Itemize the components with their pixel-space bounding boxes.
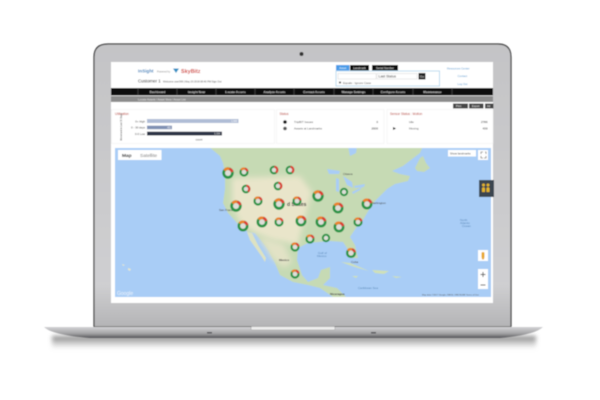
search tabs: Serial Number (376, 66, 394, 70)
north america land (208, 146, 423, 297)
search box: Go (420, 74, 424, 78)
laptop (44, 44, 543, 349)
breadcrumb bar (111, 96, 493, 102)
map labels: Ottawa (343, 172, 353, 176)
hudson bay (348, 146, 357, 156)
map labels: Mexico (279, 258, 289, 262)
street view pegman (478, 250, 488, 261)
map labels: Mexico (317, 254, 327, 258)
webcam (300, 52, 304, 56)
sensor rows: Moving (409, 127, 419, 131)
status rows: 0 (376, 120, 378, 124)
customer name: Welcome user369 | May 20 2019 08:40 PM Sign Out (163, 80, 222, 84)
panel: sensor status (387, 110, 493, 144)
utilization heading: Utilization (115, 112, 129, 116)
map labels: Atlantic (460, 221, 470, 225)
navigation bar: Locate Assets (225, 90, 246, 94)
navigation bar: Contact Assets (303, 90, 325, 94)
search tabs: Landmark (353, 66, 366, 70)
map labels: Washington (370, 201, 386, 205)
screen background (111, 62, 493, 303)
google wordmark: Google (117, 291, 133, 297)
top right links (447, 66, 470, 86)
search tabs: Asset (339, 66, 347, 70)
bar chart: 1,334 (214, 134, 221, 136)
arid west and plains tint (232, 176, 312, 246)
attribution: Map data ©2017 Google, INEGI, ORION-ME Terms of Use (422, 294, 480, 296)
great lakes (327, 169, 365, 194)
status rows (283, 120, 378, 131)
search tabs (336, 65, 398, 71)
panel: utilization (112, 110, 274, 144)
export buttons: Print (456, 104, 462, 108)
navigation bar: Dashboard (150, 90, 166, 94)
map type toggle: Map (122, 153, 132, 159)
navigation bar: Configure Assets (381, 90, 406, 94)
logo: InSight powered by SkyBitz: InSight (138, 68, 154, 74)
bar chart: 451 (167, 128, 172, 130)
bar chart (131, 119, 238, 142)
bar chart: count (196, 138, 203, 142)
side panel button (479, 180, 494, 197)
screen (111, 62, 494, 303)
search box: Equals : Ignore Case (343, 81, 371, 85)
map labels (219, 172, 471, 296)
bar chart: 1,988 (231, 121, 238, 123)
mexico tint (258, 236, 292, 268)
navigation bar: Maintenance (423, 90, 442, 94)
map labels: d States (287, 202, 307, 208)
map type toggle: Satellite (140, 153, 157, 159)
caribbean islands (341, 262, 402, 278)
bar chart: 0 - 30 days (131, 126, 146, 130)
status heading: Status (280, 112, 289, 116)
customer name (138, 78, 222, 84)
navigation bar: Manage Settings (342, 90, 366, 94)
top right links: Resources Center (447, 66, 470, 70)
map labels: Nicaragua (330, 292, 345, 296)
customer name: Customer 1 (138, 78, 161, 84)
ocean (115, 148, 491, 297)
laptop lid (94, 44, 511, 327)
search box: Last Status (378, 75, 396, 79)
sensor heading: Sensor Status : Motion (390, 112, 422, 116)
logo: InSight powered by SkyBitz: Powered by (157, 70, 171, 74)
export buttons: Ad (487, 104, 491, 108)
navigation bar: Analyze Assets (264, 90, 286, 94)
panel: status (276, 110, 384, 144)
sensor rows: 439 (482, 127, 488, 131)
map labels: Caribbean Sea (358, 286, 378, 290)
laptop base shadow (52, 336, 536, 349)
bar chart: 0+ High (135, 119, 145, 123)
laptop base (44, 327, 543, 338)
logo: InSight powered by SkyBitz (138, 68, 201, 75)
trackpad notch (251, 326, 335, 330)
export buttons: Export (472, 104, 480, 108)
status rows: Assets at Landmarks (294, 127, 323, 131)
map labels: San Francisco (219, 208, 239, 212)
status rows: TripBIT Issues (294, 120, 314, 124)
map type toggle (118, 150, 162, 160)
zoom controls (478, 269, 488, 289)
search box (336, 71, 440, 86)
top right links: Log Out (458, 82, 468, 86)
baja california (247, 232, 266, 262)
show landmarks button (448, 150, 476, 156)
map (115, 146, 494, 297)
sensor rows: Idle (409, 120, 414, 124)
fullscreen button (478, 150, 488, 160)
top right links: Contact (458, 74, 467, 78)
rubber foot left (207, 332, 212, 334)
y axis title: Movement in Last 30 Days (120, 113, 123, 141)
sensor rows (393, 120, 488, 131)
map labels: North (460, 218, 468, 222)
navigation bar (111, 88, 493, 96)
export buttons (453, 104, 494, 108)
status rows: 2000 (371, 127, 378, 131)
rubber foot right (371, 332, 376, 334)
navigation bar: Insight Now (188, 90, 206, 94)
show landmarks button: Show landmarks (450, 152, 471, 156)
breadcrumb bar: Locate Assets / Asset View / Asset List (138, 97, 186, 101)
map labels: Ocean (462, 224, 471, 228)
map labels: Gulf of (318, 251, 327, 255)
hawaii (122, 264, 131, 271)
map labels: Cuba (351, 260, 359, 264)
donut markers (224, 167, 371, 278)
newfoundland (415, 156, 430, 172)
logo: InSight powered by SkyBitz: SkyBitz (181, 69, 201, 75)
sensor rows: 2786 (481, 120, 488, 124)
bar chart: 0-0 Low (135, 132, 146, 136)
